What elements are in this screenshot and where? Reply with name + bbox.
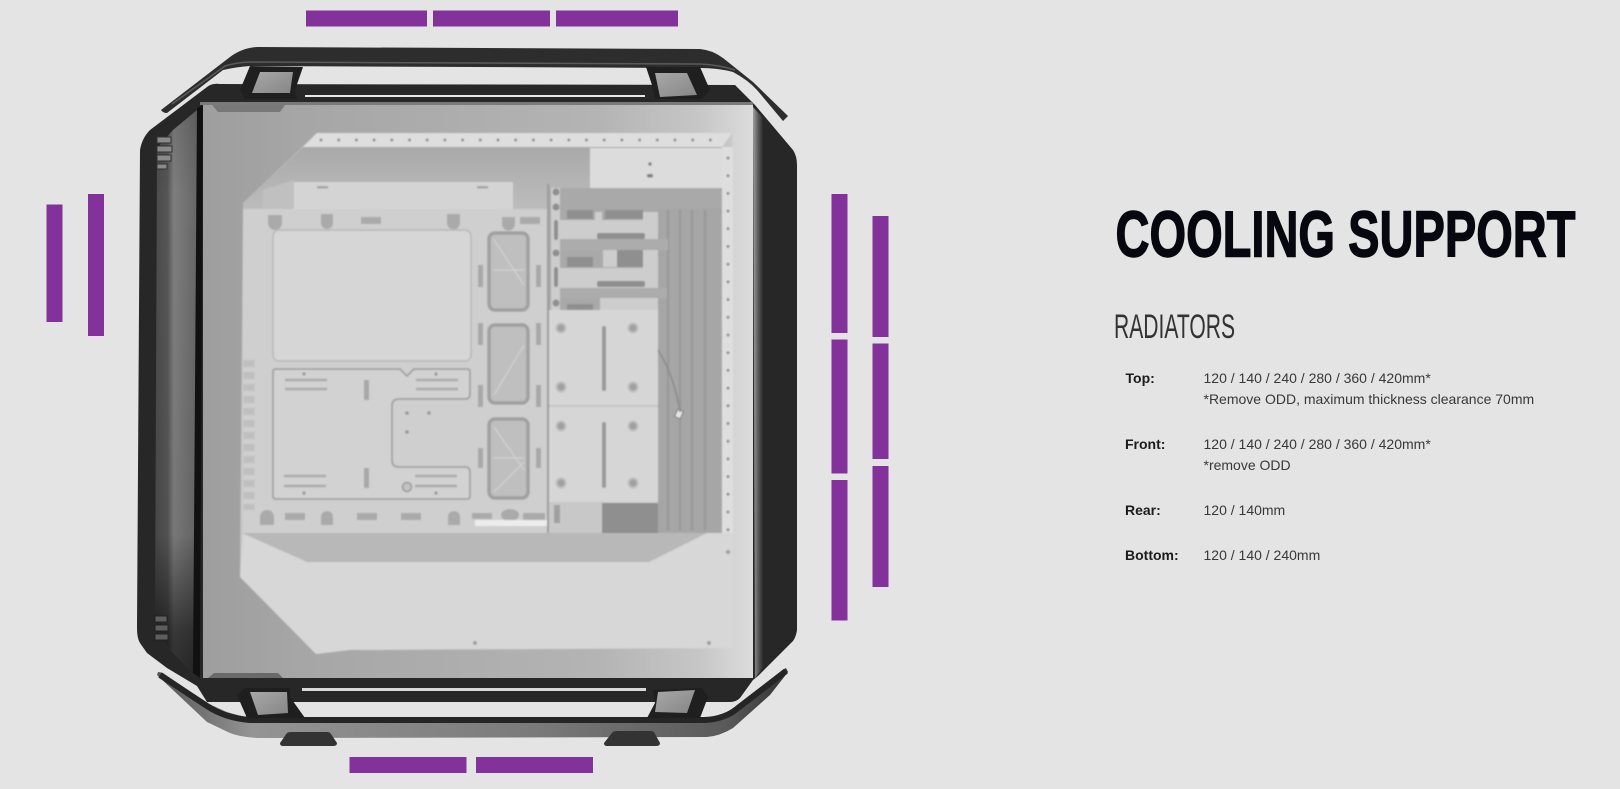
pci translucent bars bbox=[560, 239, 668, 250]
odd bay bar bbox=[294, 182, 513, 209]
bottom row: 120 / 140 / 240mm bbox=[1204, 547, 1320, 563]
upper right box bbox=[590, 148, 722, 188]
motherboard lower outline bbox=[273, 369, 470, 499]
bottom rail highlight bbox=[302, 688, 646, 691]
drive plate upper bbox=[549, 310, 658, 405]
bottom row bbox=[1125, 547, 1320, 563]
glass top frame bbox=[200, 102, 753, 105]
plate slots bbox=[602, 326, 606, 391]
top left connector bbox=[240, 66, 303, 99]
pci brackets bbox=[551, 188, 658, 310]
radiator bars: rear bbox=[46, 194, 104, 336]
top rail dots bbox=[321, 138, 724, 142]
connector block bbox=[655, 73, 697, 97]
handle shape bbox=[161, 47, 788, 121]
rear cable bbox=[658, 350, 680, 412]
subheading: RADIATORS bbox=[1114, 308, 1235, 346]
left fan detail bottom bbox=[155, 616, 168, 640]
connector block bbox=[655, 690, 695, 713]
frame tab bottom bbox=[208, 673, 283, 678]
handle surface bbox=[157, 668, 788, 738]
left fan detail top bbox=[157, 137, 172, 169]
shroud bbox=[240, 533, 733, 654]
bottom clip strip bbox=[260, 509, 545, 525]
expansion markings bbox=[284, 380, 458, 486]
rear zone lines bbox=[668, 210, 705, 530]
spec list bbox=[1125, 370, 1534, 563]
left foot bbox=[280, 732, 337, 746]
panel surface bbox=[155, 110, 197, 676]
glass left frame bbox=[193, 105, 203, 678]
radiator bars: top bbox=[306, 10, 678, 26]
cutout folds bbox=[494, 240, 524, 492]
left side panel bbox=[155, 110, 197, 676]
front row: Front: bbox=[1125, 436, 1165, 452]
panel shading bbox=[155, 110, 197, 676]
right side edge bbox=[753, 107, 763, 678]
glass panel bbox=[203, 105, 753, 678]
bottom left connector bbox=[237, 688, 305, 718]
connector frame bbox=[647, 688, 708, 718]
below plates left bbox=[549, 502, 602, 533]
pci details bbox=[552, 188, 645, 310]
top row: *Remove ODD, maximum thickness clearance 70mm bbox=[1204, 391, 1534, 407]
upper compartment bbox=[243, 147, 723, 212]
tray standoff bbox=[402, 482, 412, 492]
shroud screws bbox=[473, 550, 730, 645]
box holes bbox=[648, 162, 652, 166]
connector frame bbox=[646, 67, 710, 99]
tray screws bbox=[302, 372, 438, 495]
left perforation band bbox=[244, 360, 254, 510]
case body bbox=[137, 84, 797, 702]
top row: Top: bbox=[1126, 370, 1155, 386]
tie-down clips bbox=[364, 265, 541, 488]
rear row bbox=[1125, 502, 1285, 518]
top row: 120 / 140 / 240 / 280 / 360 / 420mm* bbox=[1204, 370, 1431, 386]
connector block bbox=[252, 72, 293, 93]
handle dark edge bbox=[160, 671, 786, 720]
PC case illustration bbox=[137, 47, 797, 746]
below plates detail bbox=[554, 505, 560, 523]
rear row: Rear: bbox=[1125, 502, 1161, 518]
right rail bbox=[722, 147, 733, 533]
front row bbox=[1125, 436, 1431, 473]
plate screws bbox=[556, 324, 638, 488]
shroud recess bbox=[243, 533, 707, 562]
top rail highlight bbox=[305, 95, 645, 97]
rear row: 120 / 140mm bbox=[1204, 502, 1285, 518]
rear connector bbox=[675, 409, 683, 419]
interior window bbox=[240, 133, 733, 654]
rear dark zone bbox=[658, 208, 722, 533]
frame tab top bbox=[212, 105, 285, 112]
bottom handle bbox=[157, 668, 788, 738]
top handle bbox=[161, 47, 788, 121]
motherboard tray bbox=[243, 209, 549, 533]
pci zone bbox=[549, 188, 722, 310]
cable cutouts bbox=[489, 233, 528, 498]
bottom row: Bottom: bbox=[1125, 547, 1179, 563]
bottom right connector bbox=[647, 688, 708, 718]
radiator bars: bottom bbox=[350, 757, 593, 773]
handle highlight bbox=[172, 62, 735, 104]
front row: *remove ODD bbox=[1204, 457, 1291, 473]
front row: 120 / 140 / 240 / 280 / 360 / 420mm* bbox=[1204, 436, 1431, 452]
top right connector bbox=[646, 67, 710, 99]
odd bay marks bbox=[317, 186, 328, 188]
connector frame bbox=[237, 688, 305, 718]
drive plate lower bbox=[549, 407, 658, 502]
white pill bbox=[475, 520, 576, 526]
connector block bbox=[250, 692, 288, 715]
right rail dots bbox=[726, 158, 730, 530]
right foot bbox=[604, 731, 660, 746]
top rail bbox=[303, 133, 732, 147]
top row bbox=[1126, 370, 1534, 407]
connector frame bbox=[240, 66, 303, 99]
upper compartment left ledge bbox=[263, 180, 294, 209]
tray divider bbox=[547, 184, 550, 533]
radiator bars: front bbox=[832, 194, 888, 620]
tray large cutout bbox=[273, 230, 471, 361]
below plates dark bbox=[602, 503, 658, 533]
interior base bbox=[240, 133, 733, 654]
tray top strip bbox=[268, 214, 540, 231]
